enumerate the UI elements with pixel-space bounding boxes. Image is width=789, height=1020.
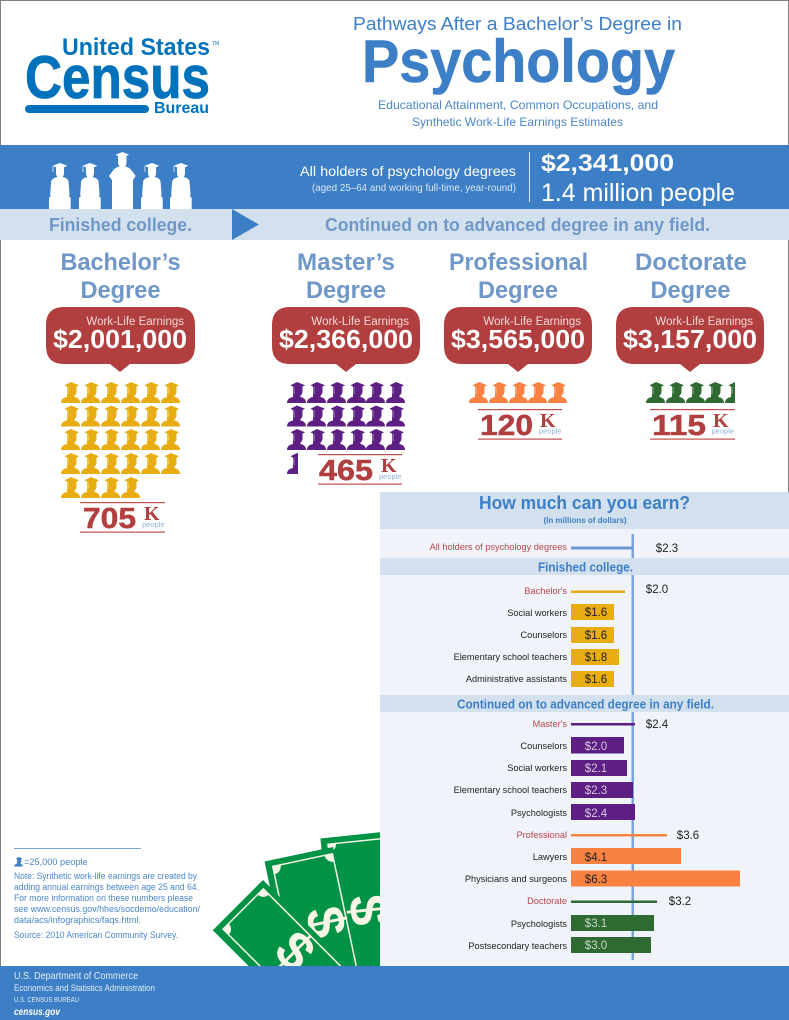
stat: earnings and people: 1.4 million people (541, 179, 735, 207)
bar: Elementary school teachers master's (454, 782, 633, 798)
count: 115K: K (713, 410, 729, 432)
logo: United States Census Bureau: TM (212, 41, 219, 47)
footer: Economics and Statistics Administration (14, 983, 155, 993)
icons: Professional people (469, 382, 567, 403)
callout: Doctorate earnings: Work-Life Earnings (655, 316, 753, 328)
row: all holders (430, 542, 678, 555)
icon: fan of dollar bills: $ (263, 920, 327, 983)
row: Professional: Professional (516, 830, 567, 840)
band: Finished college: Finished college. (538, 560, 633, 574)
bar: Physicians and surgeons: Physicians and surgeons (465, 874, 567, 884)
callout: Doctorate earnings: $3,157,000 (623, 324, 757, 354)
legend and notes (14, 848, 200, 940)
count: 120K (478, 409, 562, 442)
footer: U.S. Department of Commerce (14, 970, 138, 982)
heading: Master's Degree: Master’s (297, 249, 395, 276)
row: all holders: $2.3 (656, 543, 678, 555)
icon: fan of dollar bills (212, 832, 380, 966)
title block: Pathways After a Bachelor’s Degree in (353, 13, 682, 34)
bar: Physicians and surgeons: $6.3 (585, 874, 607, 886)
row: Professional (516, 830, 699, 842)
title block (353, 13, 682, 129)
bar: Psychologists master's: $2.4 (585, 808, 608, 820)
row: Professional: $3.6 (677, 830, 699, 842)
text: all holders: All holders of psychology degrees (300, 163, 516, 179)
legend and notes: Source: 2010 American Community Survey. (14, 930, 178, 940)
bar: Counselors (521, 627, 614, 643)
chart heading: How much can you earn? (479, 493, 690, 513)
bar: Psychologists doctorate: Psychologists (511, 919, 567, 929)
row: Doctorate: Doctorate (527, 896, 567, 906)
panel: pathway divider: Finished college. (49, 215, 192, 235)
bar: Physicians and surgeons (465, 870, 740, 886)
callout: Master's earnings: Work-Life Earnings (311, 316, 409, 328)
count: 465K: K (381, 455, 397, 477)
callout: Bachelor's earnings: Work-Life Earnings (86, 316, 184, 328)
heading: Doctorate Degree: Doctorate (635, 249, 747, 276)
bar: Elementary school teachers master's: Elementary school teachers (454, 785, 567, 795)
panel: pathway divider: Continued on to advanced degree in any field. (325, 215, 710, 235)
icon: legend person (14, 857, 23, 866)
bar: Administrative assistants: Administrative assistants (466, 674, 567, 684)
stat: earnings and people (541, 150, 735, 207)
row: Bachelor's: $2.0 (646, 584, 668, 596)
chart heading (380, 492, 789, 529)
band: Continued on (380, 695, 789, 712)
bar: Administrative assistants: $1.6 (585, 674, 607, 686)
callout: Professional earnings: $3,565,000 (451, 324, 585, 354)
text: all holders: (aged 25–64 and working full-time, year-round) (312, 182, 516, 194)
bar: Social workers (507, 604, 614, 620)
bar: Psychologists doctorate (511, 915, 654, 931)
logo: United States Census Bureau: United States (62, 34, 210, 61)
heading: Doctorate Degree (635, 249, 747, 304)
count: 465K: people (379, 472, 402, 481)
bar: Lawyers: $4.1 (585, 852, 607, 864)
row: Bachelor's (524, 584, 668, 596)
count: 705K: K (144, 503, 160, 525)
row: Master's: Master's (533, 719, 567, 729)
icon: fan of dollar bills: $ (337, 892, 400, 928)
logo: United States Census Bureau: Census (25, 44, 210, 111)
row: Bachelor's: Bachelor's (524, 586, 567, 596)
count: 115K: 115 (652, 410, 706, 442)
title block: Educational Attainment, Common Occupations, and (378, 98, 658, 112)
heading: Bachelor's Degree: Bachelor’s (60, 249, 180, 276)
bar: Psychologists doctorate: $3.1 (585, 918, 607, 930)
callout: Master's earnings: $2,366,000 (279, 324, 413, 354)
count: 705K: people (142, 520, 165, 529)
bar: Social workers: $1.6 (585, 607, 607, 619)
bar: Lawyers (533, 848, 681, 864)
count: 465K (318, 454, 402, 487)
icons: Master's people (287, 382, 405, 474)
bar: Counselors: $1.6 (585, 630, 607, 642)
legend and notes: Note: Synthetic work-life earnings are created by (14, 871, 197, 881)
bar: Psychologists master's (511, 804, 635, 820)
band: Finished college (380, 558, 789, 575)
icon: fan of dollar bills: $ (293, 901, 358, 943)
legend and notes: For more information on these numbers please (14, 893, 193, 903)
heading: Doctorate Degree: Degree (650, 277, 730, 304)
callout: Master's earnings (272, 307, 420, 372)
bar: Elementary school teachers: $1.8 (585, 652, 607, 664)
bar: Elementary school teachers (454, 649, 619, 665)
row: Master's (533, 719, 669, 731)
heading: Master's Degree: Degree (306, 277, 386, 304)
count: 465K: 465 (319, 455, 373, 487)
count: 120K: K (540, 410, 556, 432)
bar: Lawyers: Lawyers (533, 852, 567, 862)
count: 115K: people (712, 426, 734, 436)
footer: U.S. CENSUS BUREAU (14, 997, 79, 1004)
footer (0, 966, 789, 1020)
legend and notes: adding annual earnings between age 25 and 64. (14, 882, 199, 892)
footer: census.gov (14, 1006, 61, 1018)
band: Continued on: Continued on to advanced degree in any field. (457, 698, 714, 712)
callout: Professional earnings: Work-Life Earnings (483, 316, 581, 328)
callout: Bachelor's earnings: $2,001,000 (53, 324, 187, 354)
callout: Professional earnings (444, 307, 592, 372)
legend and notes: data/acs/infographics/faqs.html. (14, 915, 141, 925)
count: 120K: 120 (480, 410, 533, 442)
panel: pathway divider (0, 209, 789, 240)
bar: Counselors master's (521, 737, 624, 754)
logo: United States Census Bureau: Bureau (154, 100, 209, 117)
heading: Master's Degree (297, 249, 395, 304)
count: 705K: 705 (83, 503, 136, 535)
count: 120K: people (539, 426, 562, 436)
count: 705K (80, 502, 165, 535)
icon: graduates silhouettes (49, 152, 192, 209)
bar: Administrative assistants (466, 671, 614, 687)
text: all holders (300, 163, 516, 194)
bar: Social workers master's (507, 760, 627, 776)
bar: Elementary school teachers: Elementary school teachers (454, 652, 567, 662)
bar: Social workers master's: Social workers (507, 763, 567, 773)
bar: Postsecondary teachers (468, 937, 651, 953)
panel: How much can you earn chart (380, 492, 789, 966)
heading: Professional Degree: Professional (449, 249, 588, 276)
panel: all holders banner (0, 145, 789, 209)
chart axis: all-holders reference line (632, 534, 634, 960)
row: Master's: $2.4 (646, 719, 669, 731)
row: all holders: All holders of psychology degrees (430, 542, 567, 552)
bar: Postsecondary teachers: Postsecondary teachers (468, 941, 567, 951)
bar: Social workers: Social workers (507, 608, 567, 618)
bar: Counselors: Counselors (521, 630, 567, 640)
legend and notes: =25,000 people (24, 857, 88, 867)
heading: Bachelor's Degree (60, 249, 180, 304)
title block: Psychology (362, 28, 676, 95)
row: Doctorate: $3.2 (669, 896, 691, 908)
heading: Professional Degree (449, 249, 588, 304)
title block: Synthetic Work-Life Earnings Estimates (412, 115, 623, 129)
bar: Psychologists master's: Psychologists (511, 808, 567, 818)
bar: Counselors master's: Counselors (521, 741, 567, 751)
heading: Bachelor's Degree: Degree (80, 277, 160, 304)
bar: Social workers master's: $2.1 (585, 763, 607, 775)
callout: Doctorate earnings (616, 307, 764, 372)
chart heading: (In millions of dollars) (543, 516, 627, 525)
icons: Bachelor's people (61, 382, 180, 498)
stat: earnings and people: $2,341,000 (541, 150, 674, 177)
bar: Postsecondary teachers: $3.0 (585, 940, 607, 952)
legend and notes: see www.census.gov/hhes/socdemo/education/ (14, 904, 200, 914)
heading: Professional Degree: Degree (478, 277, 558, 304)
callout: Bachelor's earnings (46, 307, 195, 372)
bar: Counselors master's: $2.0 (585, 741, 607, 753)
bar: Elementary school teachers master's: $2.3 (585, 785, 607, 797)
icons: Doctorate people (646, 382, 744, 403)
row: Doctorate (527, 896, 691, 908)
count: 115K (650, 409, 735, 442)
